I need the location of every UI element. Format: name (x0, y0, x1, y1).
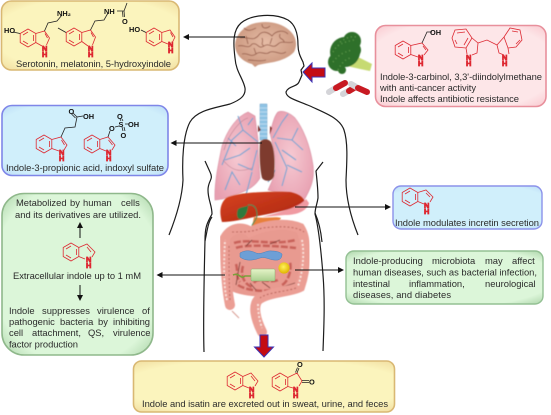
panel: extracellular indole: inhibiting (113, 316, 150, 327)
molecule: indoxyl sulfate: O (109, 124, 115, 133)
molecule: 3,3'-diindolylmethane: H (466, 59, 471, 68)
molecule: isatin: H (293, 391, 298, 400)
green rectangle microbiota (233, 269, 275, 281)
human body outline (169, 15, 358, 352)
molecule: indole (63, 243, 95, 270)
molecule: indole-3-propionic acid: OH (83, 112, 94, 121)
molecule: isatin (272, 360, 315, 400)
molecule: indoxyl sulfate: O (120, 131, 126, 140)
molecule: 5-hydroxyindole: H (168, 46, 173, 55)
panel: microbiota and disease: may (485, 255, 503, 266)
arrow: gut to extracellular indole (156, 272, 225, 278)
panel: extracellular indole: by (70, 197, 80, 208)
molecule: 5-hydroxyindole (129, 25, 175, 55)
liver (220, 192, 309, 229)
molecule: isatin: N (293, 385, 298, 394)
molecule: serotonin: HO (4, 26, 15, 35)
panel: dietary indoles: with anti-cancer activity (379, 82, 476, 93)
panel: extracellular indole: by (98, 316, 108, 327)
molecule: 5-hydroxyindole: N (168, 40, 173, 49)
panel: extracellular indole: cell (9, 327, 23, 338)
icon: broccoli (328, 32, 372, 74)
molecule: 3,3'-diindolylmethane: N (502, 53, 507, 62)
panel: incretin (393, 186, 542, 229)
yellow ball (278, 262, 290, 274)
caption: Indole-3-propionic acid, indoxyl sulfate (6, 162, 164, 173)
arrow: stomach to incretin (295, 204, 391, 210)
molecule: 3,3'-diindolylmethane (452, 28, 522, 68)
lungs (215, 111, 313, 202)
panel: extracellular indole: cells (121, 197, 140, 208)
panel: extracellular indole: of (142, 305, 150, 316)
molecule: indoxyl sulfate: H (106, 154, 111, 163)
molecule: indoxyl sulfate: S (118, 120, 124, 129)
panel: neurotransmitters (2, 1, 179, 70)
panel: extracellular indole: bacteria (60, 316, 94, 327)
panel: microbiota and disease: microbiota (432, 255, 476, 266)
panel: extracellular indole: virulence (113, 327, 151, 338)
caption: Serotonin, melatonin, 5-hydroxyindole (16, 58, 171, 69)
panel: bacterial metabolites (2, 106, 168, 176)
panel: extracellular indole: virulence (97, 305, 135, 316)
molecule: indole-3-propionic acid: N (59, 148, 64, 157)
panel: excretion (134, 360, 394, 412)
caption: Indole-3-carbinol, 3,3'-diindolylmethane (380, 71, 542, 82)
panel: microbiota and disease (346, 251, 543, 304)
molecule: indole (402, 188, 433, 216)
molecule: isatin: O (297, 360, 303, 369)
molecule: indoxyl sulfate (84, 112, 139, 163)
arrow: brain to neurotransmitters (183, 34, 245, 40)
panel: microbiota and disease: human diseases, such as bacterial infection, (353, 266, 537, 278)
molecule: indole-3-carbinol: H (418, 59, 423, 68)
molecule: serotonin: NH₂ (57, 9, 71, 18)
molecule: indoxyl sulfate: O (117, 112, 123, 121)
caption: Indole and isatin are excreted out in sweat, urine, and feces (142, 398, 388, 409)
molecule: indoxyl sulfate: OH (128, 120, 139, 129)
molecule: indole (227, 372, 258, 400)
molecule: serotonin (4, 9, 71, 59)
intestines (224, 225, 305, 332)
blue wavy organ (240, 251, 282, 260)
panel: extracellular indole: human (83, 197, 112, 208)
molecule: indole: N (86, 255, 91, 264)
trachea (258, 104, 272, 140)
molecule: 3,3'-diindolylmethane: H (502, 59, 507, 68)
molecule: indole: H (86, 261, 91, 270)
molecule: isatin: O (309, 378, 315, 386)
molecule: indole: H (249, 391, 254, 400)
panel: microbiota and disease: affect (512, 255, 535, 266)
arrow: down (77, 285, 83, 301)
arrow: gut to microbiota (295, 267, 344, 273)
molecule: indoxyl sulfate: N (106, 148, 111, 157)
panel: extracellular indole: attachment, (32, 327, 81, 338)
molecule: indole: H (424, 207, 429, 216)
panel: microbiota and disease: diseases, and diabetes (353, 289, 451, 300)
molecule: indole-3-carbinol: N (418, 53, 423, 62)
molecule: indole-3-carbinol: OH (430, 28, 441, 37)
panel: extracellular indole: pathogenic (9, 316, 55, 327)
icon: pills (329, 83, 367, 94)
molecule: indole-3-propionic acid: H (59, 154, 64, 163)
molecule: melatonin: O (122, 17, 128, 26)
panel: microbiota and disease: intestinal (353, 278, 390, 289)
heart (260, 139, 275, 181)
molecule: 3,3'-diindolylmethane: N (466, 53, 471, 62)
arrow: up (77, 222, 83, 238)
panel: extracellular indole: and its derivatives are utilized. (15, 209, 141, 220)
molecule: melatonin (58, 3, 128, 59)
arrow: excretion downward (254, 335, 274, 357)
molecule: melatonin: N (88, 44, 93, 53)
panel: extracellular indole: Metabolized (16, 197, 67, 208)
panel: dietary indoles (376, 26, 546, 106)
molecule: melatonin: H (88, 50, 93, 59)
molecule: melatonin: NH (104, 7, 115, 16)
molecule: 5-hydroxyindole: HO (129, 25, 140, 34)
panel: microbiota and disease: Indole-producing (353, 255, 423, 266)
molecule: indole: N (424, 201, 429, 210)
molecule: indole-3-propionic acid: O (68, 107, 74, 116)
molecule: indole-3-carbinol (395, 28, 441, 68)
molecule: indole-3-propionic acid (36, 107, 94, 163)
panel: dietary indoles: Indole affects antibiotic resistance (380, 93, 519, 104)
molecule: serotonin: H (42, 50, 47, 59)
panel: microbiota and disease: inflammation, (409, 278, 465, 289)
panel: microbiota and disease: neurological (485, 278, 536, 289)
panel: extracellular indole: QS, (88, 327, 104, 338)
molecule: indole: N (249, 385, 254, 394)
panel: extracellular indole: Extracellular indole up to 1 mM (13, 270, 141, 281)
brain (235, 22, 296, 67)
arrow: food entering mouth (303, 63, 325, 82)
panel: extracellular indole: Indole (9, 305, 35, 316)
arrow: lungs to metabolites (170, 140, 262, 146)
panel: extracellular indole: factor production (9, 338, 78, 350)
panel: extracellular indole (2, 194, 153, 355)
caption: Indole modulates incretin secretion (395, 217, 539, 228)
panel: extracellular indole: suppresses (42, 305, 90, 316)
molecule: serotonin: N (42, 44, 47, 53)
